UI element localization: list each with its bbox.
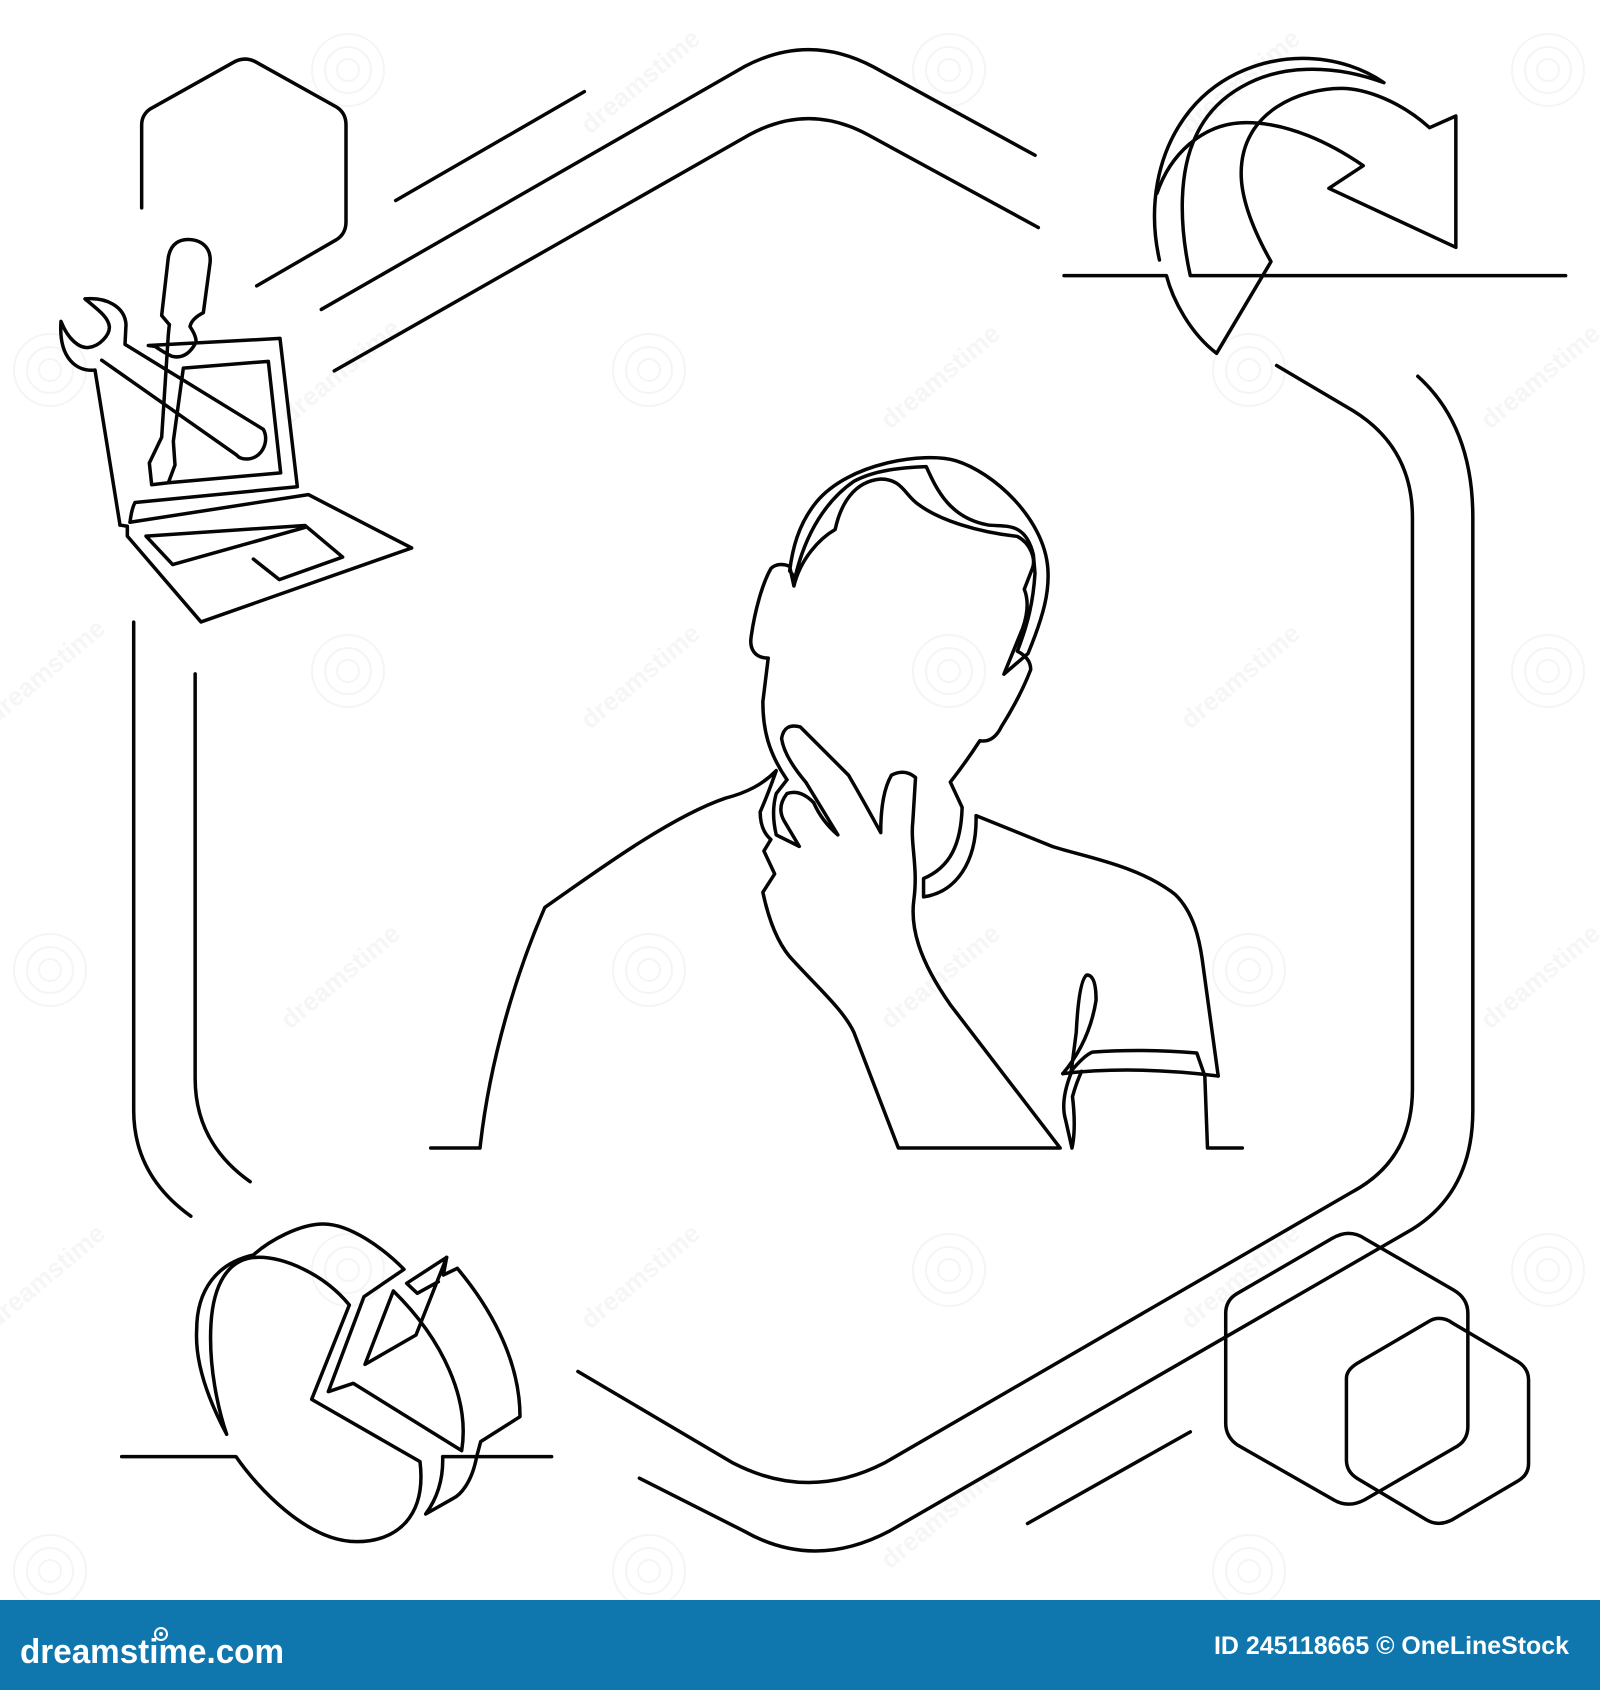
watermark pattern: dreamstime: [1175, 618, 1306, 735]
central figure: thinking man: [431, 458, 1242, 1148]
small hexagon: [1346, 1318, 1529, 1523]
sleeve loop: [1063, 975, 1096, 1148]
watermark pattern: dreamstime: [275, 918, 406, 1035]
sleeve and arm: [1063, 1070, 1218, 1076]
watermark pattern: dreamstime: [1175, 23, 1306, 140]
keyboard: [146, 525, 343, 580]
watermark pattern: dreamstime: [1175, 1218, 1306, 1335]
footer band: [0, 1600, 1600, 1690]
icon: exploded pie chart: [122, 1224, 552, 1542]
screwdriver handle: [130, 239, 297, 522]
body and hand: [431, 726, 1060, 1148]
screwdriver shaft and screen: [149, 325, 281, 485]
large hexagon: [1226, 1233, 1468, 1504]
icon: two overlapping hexagons: [1226, 1233, 1529, 1523]
watermark pattern: dreamstime: [875, 1458, 1006, 1575]
watermark pattern: dreamstime: [875, 318, 1006, 435]
watermark pattern: dreamstime: [575, 23, 706, 140]
hexagonal double-line frame: [134, 50, 1473, 1551]
watermark pattern: dreamstime: [575, 1218, 706, 1335]
wrench: [61, 299, 266, 525]
laptop base: [120, 495, 412, 622]
watermark pattern: dreamstime: [275, 313, 406, 430]
head and hair: [751, 458, 1218, 1076]
image ID and credit: ID 245118665 © OneLineStock: [1214, 1632, 1569, 1660]
small hexagon outline: [142, 59, 346, 286]
watermark pattern: dreamstime: [875, 918, 1006, 1035]
watermark pattern: dreamstime: [575, 618, 706, 735]
icon: curved arrow on a map pin: [1064, 58, 1566, 353]
logo: dreamstime.com: dreamstime.com: [20, 1633, 284, 1671]
icon: laptop with wrench and screwdriver: [61, 59, 412, 622]
